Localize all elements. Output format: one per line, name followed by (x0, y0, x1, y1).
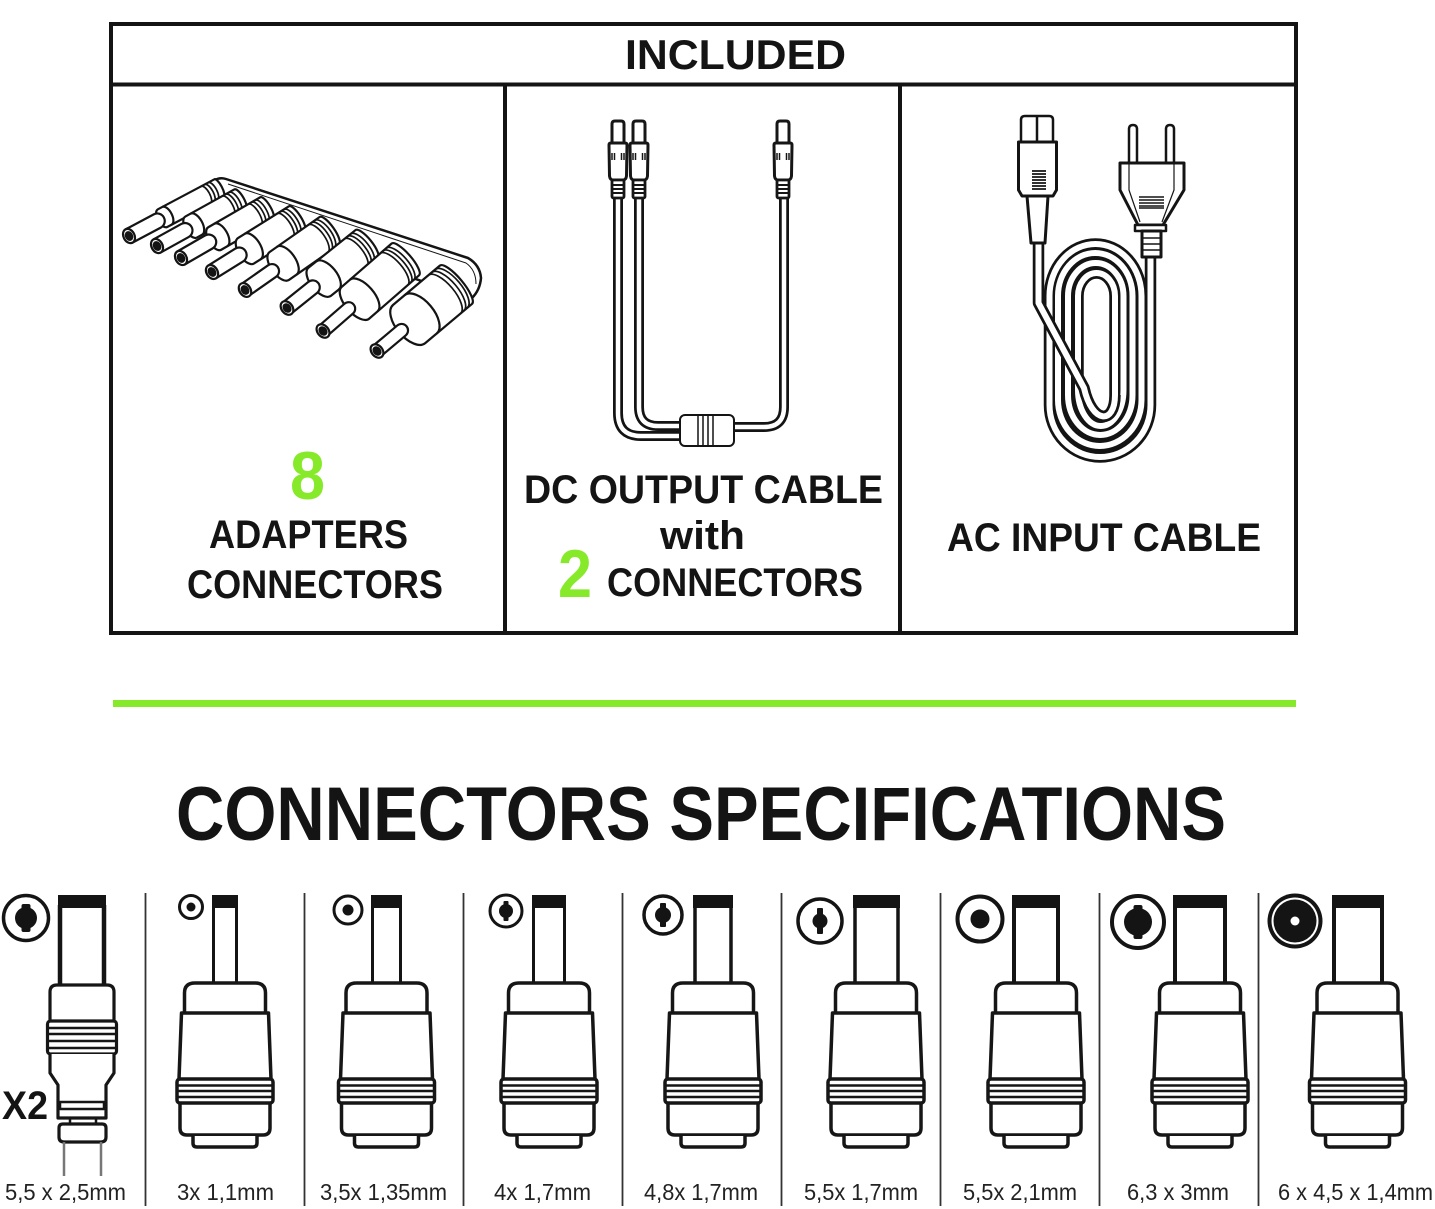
text: dc output cable with 2 connectors: with (659, 514, 745, 558)
label: size 2: 3x 1,1mm (177, 1179, 274, 1205)
icon: polarity dial 6 (798, 899, 842, 943)
label: size 5: 4,8x 1,7mm (644, 1179, 758, 1205)
heading: connectors specifications: CONNECTORS SPECIFICATIONS (176, 772, 1226, 857)
icon: polarity dial 5 (644, 896, 682, 934)
icon: dc output cable (609, 121, 792, 446)
icon: ac input cable (1018, 116, 1184, 457)
label: size 4: 4x 1,7mm (494, 1179, 591, 1205)
connector 6: 5,5x 1,7mm (798, 895, 924, 1205)
text: dc output cable with 2 connectors: CONNECTORS (607, 561, 863, 605)
label: size 7: 5,5x 2,1mm (963, 1179, 1077, 1205)
connector 3: 3,5x 1,35mm (320, 895, 447, 1205)
icon: polarity dial 3 (334, 896, 362, 924)
connector 8: 6,3 x 3mm (1112, 895, 1248, 1205)
connector 4: 4x 1,7mm (490, 895, 597, 1205)
icon: polarity dial 1 (4, 896, 48, 940)
icon: polarity dial 9 (1268, 894, 1322, 948)
connector 1: 5,5 x 2,5mm x2 (2, 895, 126, 1205)
text: dc output cable with 2 connectors (524, 468, 883, 612)
label: size 3: 3,5x 1,35mm (320, 1179, 447, 1205)
label: x2: X2 (2, 1084, 48, 1128)
text: ac input cable: AC INPUT CABLE (947, 516, 1261, 560)
connector 7: 5,5x 2,1mm (958, 895, 1084, 1205)
label: size 8: 6,3 x 3mm (1127, 1179, 1229, 1205)
heading: included: INCLUDED (625, 31, 846, 78)
text: 8 adapters connectors: ADAPTERS (209, 513, 408, 557)
icon: eight adapter connectors (119, 178, 481, 374)
icon: polarity dial 4 (490, 895, 522, 927)
connector 5: 4,8x 1,7mm (644, 895, 761, 1205)
icon: polarity dial 2 (180, 896, 202, 918)
icon: polarity dial 8 (1112, 896, 1164, 948)
label: size 6: 5,5x 1,7mm (804, 1179, 918, 1205)
label: size 1: 5,5 x 2,5mm (5, 1179, 126, 1205)
divider: green bar (113, 700, 1296, 707)
text: 8 adapters connectors: 8 (290, 438, 325, 514)
text: dc output cable with 2 connectors: DC OUTPUT CABLE (524, 468, 883, 512)
text: 8 adapters connectors: CONNECTORS (187, 563, 443, 607)
connector 2: 3x 1,1mm (177, 895, 274, 1205)
connector 9: 6 x 4,5 x 1,4mm (1268, 894, 1433, 1205)
icon: polarity dial 7 (958, 896, 1002, 942)
text: 8 adapters connectors (187, 438, 443, 607)
text: dc output cable with 2 connectors: 2 (558, 536, 592, 612)
